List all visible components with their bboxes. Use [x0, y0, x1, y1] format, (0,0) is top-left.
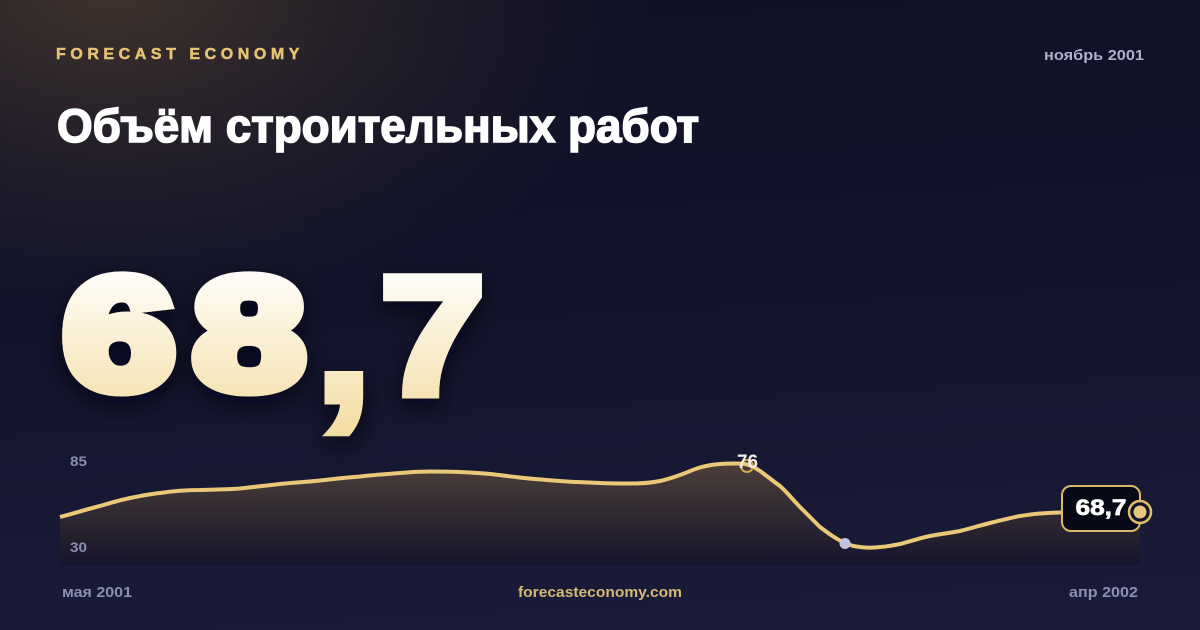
big value: 7 — [380, 242, 485, 431]
date label: ноябрь 2001 — [1044, 47, 1144, 64]
chart line — [60, 463, 1100, 548]
y axis label: 30: 30 — [70, 539, 87, 555]
big value — [64, 218, 485, 447]
big value: 8 — [194, 247, 305, 422]
chart area fill — [60, 463, 1140, 565]
title: Объём строительных работ — [57, 99, 699, 152]
source link: forecasteconomy.com — [518, 584, 682, 601]
peak label: 76 — [737, 452, 758, 473]
end value callout: 68,7 — [1076, 495, 1126, 520]
low marker — [840, 538, 850, 549]
end date label: апр 2002 — [1069, 584, 1138, 601]
big value: 6 — [64, 247, 175, 422]
big value: , — [309, 218, 378, 447]
end marker — [1129, 501, 1151, 523]
peak marker — [741, 460, 753, 472]
end value callout — [1062, 486, 1140, 531]
line chart — [60, 452, 1151, 565]
start date label: мая 2001 — [62, 584, 132, 601]
brand label: FORECAST ECONOMY — [56, 46, 304, 63]
y axis label: 85: 85 — [70, 453, 87, 469]
